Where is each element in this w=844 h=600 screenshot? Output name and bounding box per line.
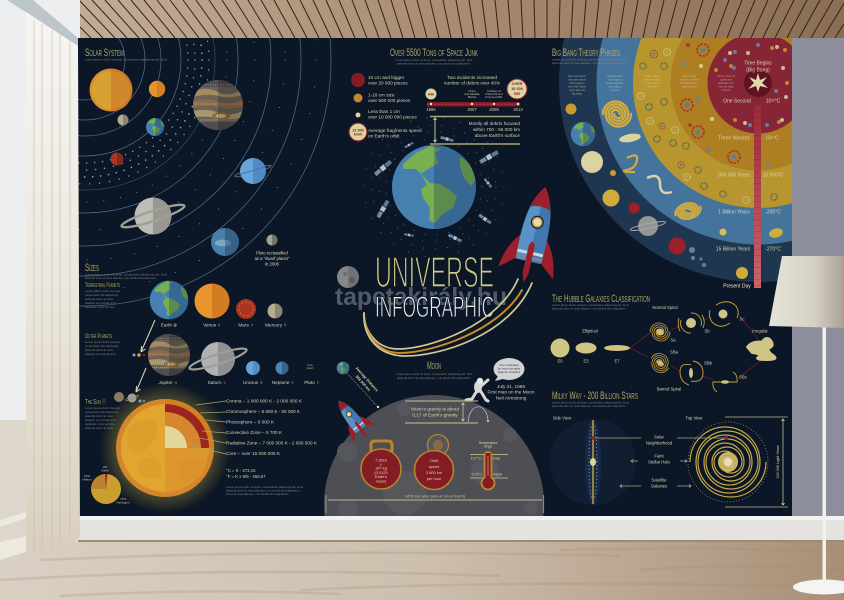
terrestrial labels: Venus ♀ <box>203 322 221 328</box>
sun layer leader lines <box>188 401 226 454</box>
phase descriptions: Matter cools <box>645 75 660 78</box>
sun footnote: tortor at risus aliquam, non iaculis arcu dignissim. <box>226 492 289 496</box>
room: curtain <box>26 12 80 552</box>
callout labels: Faint <box>654 454 664 458</box>
earth-moon distance <box>337 362 379 408</box>
phase descriptions: quarks and <box>720 78 733 82</box>
time labels: -270°C <box>765 246 781 252</box>
time labels: -200°C <box>765 210 781 216</box>
sun description: consectetur elit adipiscing <box>85 410 118 414</box>
sun layer labels: Core – over 15 000 000 K <box>226 451 281 456</box>
phase descriptions: neutrons combine <box>679 78 700 82</box>
planet: saturn <box>120 198 186 234</box>
phase descriptions: stars begin to <box>569 82 585 85</box>
heading: solar system: Solar System <box>85 47 124 59</box>
temperature formulas: °C = K - 273,15 <box>226 468 256 473</box>
pie chart: sun composition: Helium <box>82 478 92 482</box>
phase descriptions <box>568 75 735 96</box>
pluto note: in 2006 <box>265 262 280 266</box>
callout labels: Solar <box>654 434 664 440</box>
kettlebell: moon mass: 7,35x9 <box>375 458 387 462</box>
planet: sun <box>90 68 132 112</box>
sun footnote: placerat tortor at risus aliquam, non iaculis arcu dignissim. <box>226 488 300 492</box>
sun layer labels: Radiative Zone – 7 000 000 K - 2 000 000 K <box>226 440 318 446</box>
outer description: placerat tortor at risus <box>85 348 114 352</box>
phase descriptions: over billions <box>608 86 622 88</box>
gravity diagram <box>405 401 489 423</box>
moon landing note: Neil Armstrong <box>496 396 527 400</box>
time labels: (Big Bang) <box>746 68 770 74</box>
elliptical galaxies <box>550 338 630 358</box>
outer description: consectetur elit adipiscing <box>85 344 118 348</box>
debris note: number of debris over 40% <box>444 80 500 86</box>
section: space junk <box>349 47 527 257</box>
heading: space junk: Over 5500 Tons of Space Junk <box>390 47 478 59</box>
size: mercury <box>268 304 282 318</box>
sun cutaway diagram <box>99 382 231 514</box>
debris dots around earth <box>364 117 504 257</box>
debris timeline: Collision of <box>487 89 501 93</box>
phase descriptions: and begin to <box>608 78 622 82</box>
watermark: tapetakirály.hu <box>335 283 507 311</box>
moon diameter <box>326 494 544 513</box>
stopwatch: orbit speed: per hour <box>427 476 442 481</box>
thermometer: temperature range: -173°C <box>470 472 482 476</box>
rocket <box>496 181 573 289</box>
pluto size note: (dwarf) <box>306 367 314 370</box>
mini solar system row <box>132 353 145 357</box>
galaxy labels: SBa <box>670 350 679 354</box>
small rocket <box>328 392 378 446</box>
junk size legend: Less than 1 cm <box>368 109 400 114</box>
pluto note: Pluto reclassified <box>256 250 288 256</box>
junk size legend: over 10 000 000 pieces <box>368 114 417 120</box>
astronaut <box>466 378 488 401</box>
outer description: Lorem ipsum dolor sit amet <box>85 340 120 344</box>
callout labels: Galaxies <box>651 484 667 488</box>
thermometer: temperature range <box>470 441 508 490</box>
milky way description: placerat tortor at risus aliquam, non iaculis arcu dignissim. <box>552 404 626 408</box>
view labels <box>553 416 703 420</box>
orbit altitude bracket <box>430 116 520 144</box>
room: window and left wall <box>0 0 80 560</box>
hubble description: Lorem ipsum dolor sit amet, consectetur adipiscing elit. Duis <box>552 303 630 307</box>
big bang description: placerat tortor at risus aliquam, non iaculis arcu dignissim. <box>552 61 626 65</box>
size: saturn <box>188 342 248 376</box>
debris timeline: 2007 <box>467 107 477 112</box>
kettlebell: moon mass <box>361 441 401 489</box>
sizes description <box>85 274 167 280</box>
phase descriptions: Protons and <box>682 75 696 78</box>
outer planet labels: Neptune ♆ <box>272 380 294 385</box>
debris timeline: 000 <box>514 92 520 96</box>
time labels: Time Begins <box>744 60 772 66</box>
terrestrial description: placerat tortor at risus <box>85 297 114 301</box>
room: ceiling <box>33 0 844 38</box>
junk size legend: 10 cm and bigger <box>368 75 405 80</box>
space junk description: Lorem ipsum dolor sit amet, consectetur adipiscing elit. Duis <box>396 58 473 62</box>
barred spirals <box>647 350 737 392</box>
junk size legend: over 20 000 pieces <box>368 80 408 86</box>
terrestrial description <box>85 289 120 309</box>
galaxy labels: SBb <box>704 360 713 366</box>
section: hubble classification <box>550 293 775 392</box>
pluto note: as a "dwarf planet" <box>255 256 290 261</box>
junk size legend: over 500 000 pieces <box>368 98 411 103</box>
time labels: One Second <box>723 98 751 104</box>
debris timeline: 10 000 <box>511 87 523 91</box>
temperature formulas <box>226 468 266 479</box>
debris timeline: China <box>468 89 476 93</box>
phase descriptions: Stars being born <box>568 75 587 78</box>
speech bubble: leap for mankind <box>498 370 520 374</box>
debris timeline: Missile <box>468 95 477 99</box>
atoms in yellow and gold rings <box>638 43 777 203</box>
heading: sizes: Sizes <box>85 262 99 274</box>
heading: big bang: Big Bang Theory Phases <box>552 47 620 59</box>
orbit altitude bracket: Mostly all debris focused <box>469 121 520 126</box>
space junk description: placerat tortor at risus aliquam, non iaculis arcu dignissim. <box>397 62 471 66</box>
galaxy labels: Sa <box>670 338 676 342</box>
outer description <box>85 340 120 356</box>
milky way description: Lorem ipsum dolor sit amet, consectetur adipiscing elit. Duis <box>552 400 630 404</box>
rocket exhaust swooshes <box>364 279 532 356</box>
moon landing note <box>488 384 535 400</box>
phase descriptions: forming the first <box>680 82 698 85</box>
debris timeline: OVER <box>512 82 523 86</box>
outer planet labels <box>158 380 319 385</box>
pie chart: sun composition: 74% <box>120 497 126 501</box>
callout labels: Stellar Halo <box>648 460 670 464</box>
phase descriptions: universe <box>721 89 731 92</box>
outer planet labels: Uranus ♅ <box>243 380 263 385</box>
speed badge: 13 900 <box>352 128 364 132</box>
pie chart: sun composition: 2% <box>103 465 107 469</box>
planet: mars <box>110 152 124 166</box>
junk size legend: 1-10 cm size <box>368 92 395 98</box>
stopwatch: orbit speed <box>414 434 454 490</box>
sun footnote: Lorem ipsum dolor sit amet, consectetur adipiscing elit. Duis <box>226 485 304 489</box>
mini outer planets row <box>114 392 145 402</box>
speed badge <box>349 123 367 141</box>
time labels: 300 000 Years <box>718 172 750 178</box>
debris note: Two incidents increased <box>447 75 497 80</box>
section: milky way <box>550 390 788 507</box>
thermometer: temperature range: Night <box>493 472 503 476</box>
sun description: aliquam non iaculis arcu <box>85 418 116 422</box>
space junk description <box>396 58 473 66</box>
planets in dark ring <box>566 104 748 279</box>
thermometer: temperature range: range <box>484 444 492 448</box>
size: uranus <box>246 361 260 375</box>
terrestrial description: Lorem ipsum dolor sit amet <box>85 289 120 293</box>
quark particles <box>714 43 789 127</box>
asteroid belt and stars <box>78 38 316 292</box>
debris timeline: anti-Satellite <box>464 92 480 96</box>
milky way top view <box>688 422 768 502</box>
sun description: placerat tortor at risus <box>85 414 114 418</box>
timeline bar <box>754 105 761 288</box>
galaxy labels: SBc <box>739 374 747 380</box>
speed badge: km/h <box>354 132 363 136</box>
phase descriptions: electrons bind <box>644 78 660 82</box>
galaxy labels: Sc <box>740 316 744 322</box>
section: sizes <box>85 262 320 402</box>
milky way side view <box>550 419 636 505</box>
gravity diagram: Moon's gravity is about <box>411 406 460 412</box>
room: wooden floor <box>0 542 844 600</box>
subheading: terrestrial planets: Terrestrial Planets <box>85 282 120 289</box>
moon body <box>324 395 544 600</box>
time labels <box>716 60 784 290</box>
speech bubble: for man one giant <box>498 366 520 370</box>
orbit altitude bracket: within 700 - 56 000 km <box>473 127 520 132</box>
outer planet labels: Jupiter ♃ <box>159 380 177 385</box>
room: right wall <box>792 38 844 516</box>
terrestrial labels: Earth ⊕ <box>161 322 177 328</box>
hubble description <box>552 303 630 310</box>
stopwatch: orbit speed: Orbit <box>430 458 439 463</box>
arrow: terrestrial scale <box>141 320 155 352</box>
solar system description: Lorem ipsum dolor sit amet, consectetur adipiscing elit. Duis <box>85 58 168 62</box>
stopwatch: orbit speed: 3 600 km <box>426 470 442 475</box>
milky way description <box>552 400 630 408</box>
big bang description <box>552 58 630 65</box>
section: main title <box>335 181 573 356</box>
section: the sun <box>82 382 318 514</box>
phase descriptions: to form atoms <box>644 82 660 85</box>
planet: jupiter <box>193 80 243 130</box>
speech bubble <box>494 358 524 381</box>
pie chart: sun composition: Other <box>101 468 109 472</box>
kettlebell: moon mass: (0,0123 <box>374 470 388 475</box>
time labels: Present Day <box>723 284 751 290</box>
pluto note <box>254 251 290 266</box>
phase descriptions: Big Bang <box>572 92 583 96</box>
mural poster background <box>78 38 792 516</box>
pie chart: sun composition: 24% <box>84 474 90 478</box>
callout labels <box>646 434 673 488</box>
galaxy labels: E3 <box>583 358 589 364</box>
phase descriptions: years after the <box>569 89 586 92</box>
moon diameter: 3476 km wide (about 1/4 of Earth) <box>405 494 466 498</box>
planet: earth <box>146 118 164 136</box>
phase descriptions: antimatter in a <box>718 82 735 85</box>
temperature formulas: °F = K x 9/5 - 459,67 <box>226 474 266 479</box>
subheading: outer planets: Outer Planets <box>85 333 112 340</box>
kettlebell: moon mass: Earth's <box>375 474 387 479</box>
size: venus <box>194 284 230 318</box>
big bang description: Lorem ipsum dolor sit amet, consectetur adipiscing elit. Duis <box>552 58 630 62</box>
pie chart: sun composition: Hydrogen <box>116 500 130 504</box>
sizes description: placerat tortor at risus aliquam, non iaculis arcu dignissim. <box>85 276 157 280</box>
tuning fork lines <box>630 313 768 380</box>
size: mars <box>236 299 256 319</box>
moon landing note: First man on the Moon <box>488 390 535 394</box>
callout labels: Neighborhood <box>646 440 673 446</box>
moon description: Lorem ipsum dolor sit amet, consectetur adipiscing elit. Duis <box>396 372 473 376</box>
phase descriptions: of years <box>611 89 620 92</box>
phase descriptions: Being "soup" of <box>717 75 735 78</box>
hubble description: placerat tortor at risus aliquam, non iaculis arcu dignissim. <box>552 306 626 310</box>
large earth <box>392 145 476 229</box>
sun description: Lorem ipsum dolor sit amet <box>85 406 120 410</box>
room: floor lamp <box>769 256 844 594</box>
size: earth <box>150 281 188 319</box>
planet: mercury <box>118 114 128 126</box>
debris timeline: Iridium33 and <box>486 92 503 96</box>
phase descriptions: from gas clouds <box>568 78 587 82</box>
thermometer: temperature range: 127°C <box>470 456 482 460</box>
sun layer labels: Photosphere – 6 000 K <box>226 420 275 424</box>
pluto size note: Pluto <box>307 364 313 367</box>
sun description: placerat tortor at risus <box>85 426 114 430</box>
galaxies in blue ring <box>603 101 784 239</box>
view labels: Side View <box>553 416 572 420</box>
view labels: Top View <box>686 416 703 420</box>
sun layer labels: Corona – 1 000 000 K - 2 000 000 K <box>226 398 303 404</box>
debris timeline: 1996 <box>426 107 436 112</box>
callout labels: Satellite <box>652 478 667 482</box>
phase descriptions: and light <box>647 86 657 88</box>
terrestrial description: dignissim tortor at risus <box>85 305 115 309</box>
milky way callouts <box>595 438 724 488</box>
debris timeline: 2009 <box>489 107 499 112</box>
thermometer: temperature range: Temperature <box>478 441 498 445</box>
room: baseboard <box>78 516 844 542</box>
outer planet labels: Saturn ♄ <box>208 380 226 385</box>
heading: milky way: Milky Way - 200 Billion Stars <box>552 390 638 402</box>
galaxy labels: Sb <box>704 328 710 334</box>
debris note <box>444 75 500 86</box>
galaxy labels: Irregular <box>752 328 768 334</box>
arrow: outer scale <box>136 368 146 392</box>
phase descriptions: atomic nuclei <box>682 86 697 88</box>
pie chart: sun composition <box>82 465 130 504</box>
terrestrial labels: Mars ♂ <box>238 322 254 328</box>
phase descriptions: Galaxies form <box>607 75 623 78</box>
outer planet labels: Pluto ♇ <box>304 380 320 385</box>
terrestrial description: aliquam non iaculis arcu <box>85 301 116 305</box>
time labels: 10³²°C <box>766 98 781 104</box>
stopwatch: orbit speed: speed <box>429 464 439 469</box>
phase descriptions: cluster together <box>606 82 624 85</box>
orbit altitude bracket: above Earth's surface <box>475 133 520 138</box>
time labels: Three Minutes <box>718 136 750 142</box>
time labels: 1 Billion Years <box>718 210 750 216</box>
earth-moon distance: 384 000 km <box>354 374 371 393</box>
debris timeline: Kosmos-2251 <box>485 95 503 99</box>
sun layer labels: Convective Zone – 5 700 K <box>226 430 283 435</box>
sun description: dignissim tortor at risus <box>85 422 115 426</box>
moon landing note: July 21, 1969 <box>497 384 525 389</box>
outer description: aliquam non iaculis arcu <box>85 352 116 356</box>
phase descriptions: very hot early <box>718 86 734 88</box>
moon description <box>396 372 473 380</box>
galaxy labels: Normal Spiral <box>652 305 678 310</box>
sun footnote <box>226 485 304 496</box>
sizes description: Lorem ipsum dolor sit amet, consectetur adipiscing elit. Duis <box>85 272 168 276</box>
heading: moon: Moon <box>427 360 441 372</box>
normal spirals <box>650 302 738 341</box>
time labels: 15 Billion Years <box>716 246 751 252</box>
kettlebell: moon mass: × <box>380 462 382 466</box>
gravity diagram: 0,17 of Earth's gravity <box>412 412 458 418</box>
diameter bracket <box>725 417 788 507</box>
junk size legend: Average fragments speed <box>368 128 422 133</box>
earth-moon distance: Average Distance <box>355 366 379 392</box>
section: big bang theory phases <box>552 0 844 290</box>
moon decoration <box>337 266 359 288</box>
debris timeline: 2013 <box>513 107 523 112</box>
planet: pluto <box>266 234 278 246</box>
irregular galaxy <box>747 338 775 360</box>
moon description: placerat tortor at risus aliquam, non iaculis arcu dignissim. <box>397 376 471 380</box>
pluto size note <box>306 364 314 370</box>
section: moon <box>324 358 544 600</box>
satellites <box>374 136 499 243</box>
terrestrial labels: Mercury ☿ <box>265 322 287 328</box>
solar system orbits <box>78 38 332 306</box>
galaxy labels: E0 <box>557 358 563 364</box>
big bang rings <box>559 0 844 282</box>
heading: the sun: The Sun ☉ <box>85 398 106 406</box>
debris timeline: 946 <box>428 92 434 96</box>
debris timeline <box>426 79 527 112</box>
big bang star <box>744 69 772 97</box>
time labels: 10 000°C <box>763 172 784 178</box>
diameter bracket: 100 000 Light Years <box>776 445 780 479</box>
size: jupiter <box>148 334 190 376</box>
terrestrial description: consectetur elit adipiscing <box>85 293 118 297</box>
sun layer labels <box>226 398 318 456</box>
sun description <box>85 406 120 430</box>
junk size legend <box>351 73 422 138</box>
thermometer: temperature range: Day <box>493 456 500 460</box>
phase descriptions: form 400 million <box>568 86 586 88</box>
galaxy labels: Barred Spiral <box>657 386 681 392</box>
time labels: 10⁹°C <box>765 136 779 142</box>
galaxy labels: E7 <box>614 358 620 364</box>
title: universe: UNIVERSE <box>375 248 494 297</box>
planet: uranus <box>234 158 272 184</box>
size: neptune <box>276 362 288 374</box>
kettlebell: moon mass: 10²² kg <box>375 466 387 470</box>
sun layer labels: Chromosphere – 5 800 K - 55 000 K <box>226 409 301 414</box>
section: solar system <box>78 38 332 306</box>
heading: hubble: The Hubble Galaxies Classification <box>552 293 650 305</box>
planet: venus <box>149 81 165 97</box>
kettlebell: moon mass: mass) <box>376 478 387 484</box>
galaxy labels <box>557 305 768 392</box>
junk size legend: on Earth's orbit <box>368 134 400 138</box>
galaxy labels: Elliptical <box>582 328 598 334</box>
speech bubble: One small step <box>499 363 519 367</box>
terrestrial labels <box>161 323 286 328</box>
title: infographic: INFOGRAPHIC <box>375 291 494 324</box>
planet: neptune <box>211 228 239 256</box>
